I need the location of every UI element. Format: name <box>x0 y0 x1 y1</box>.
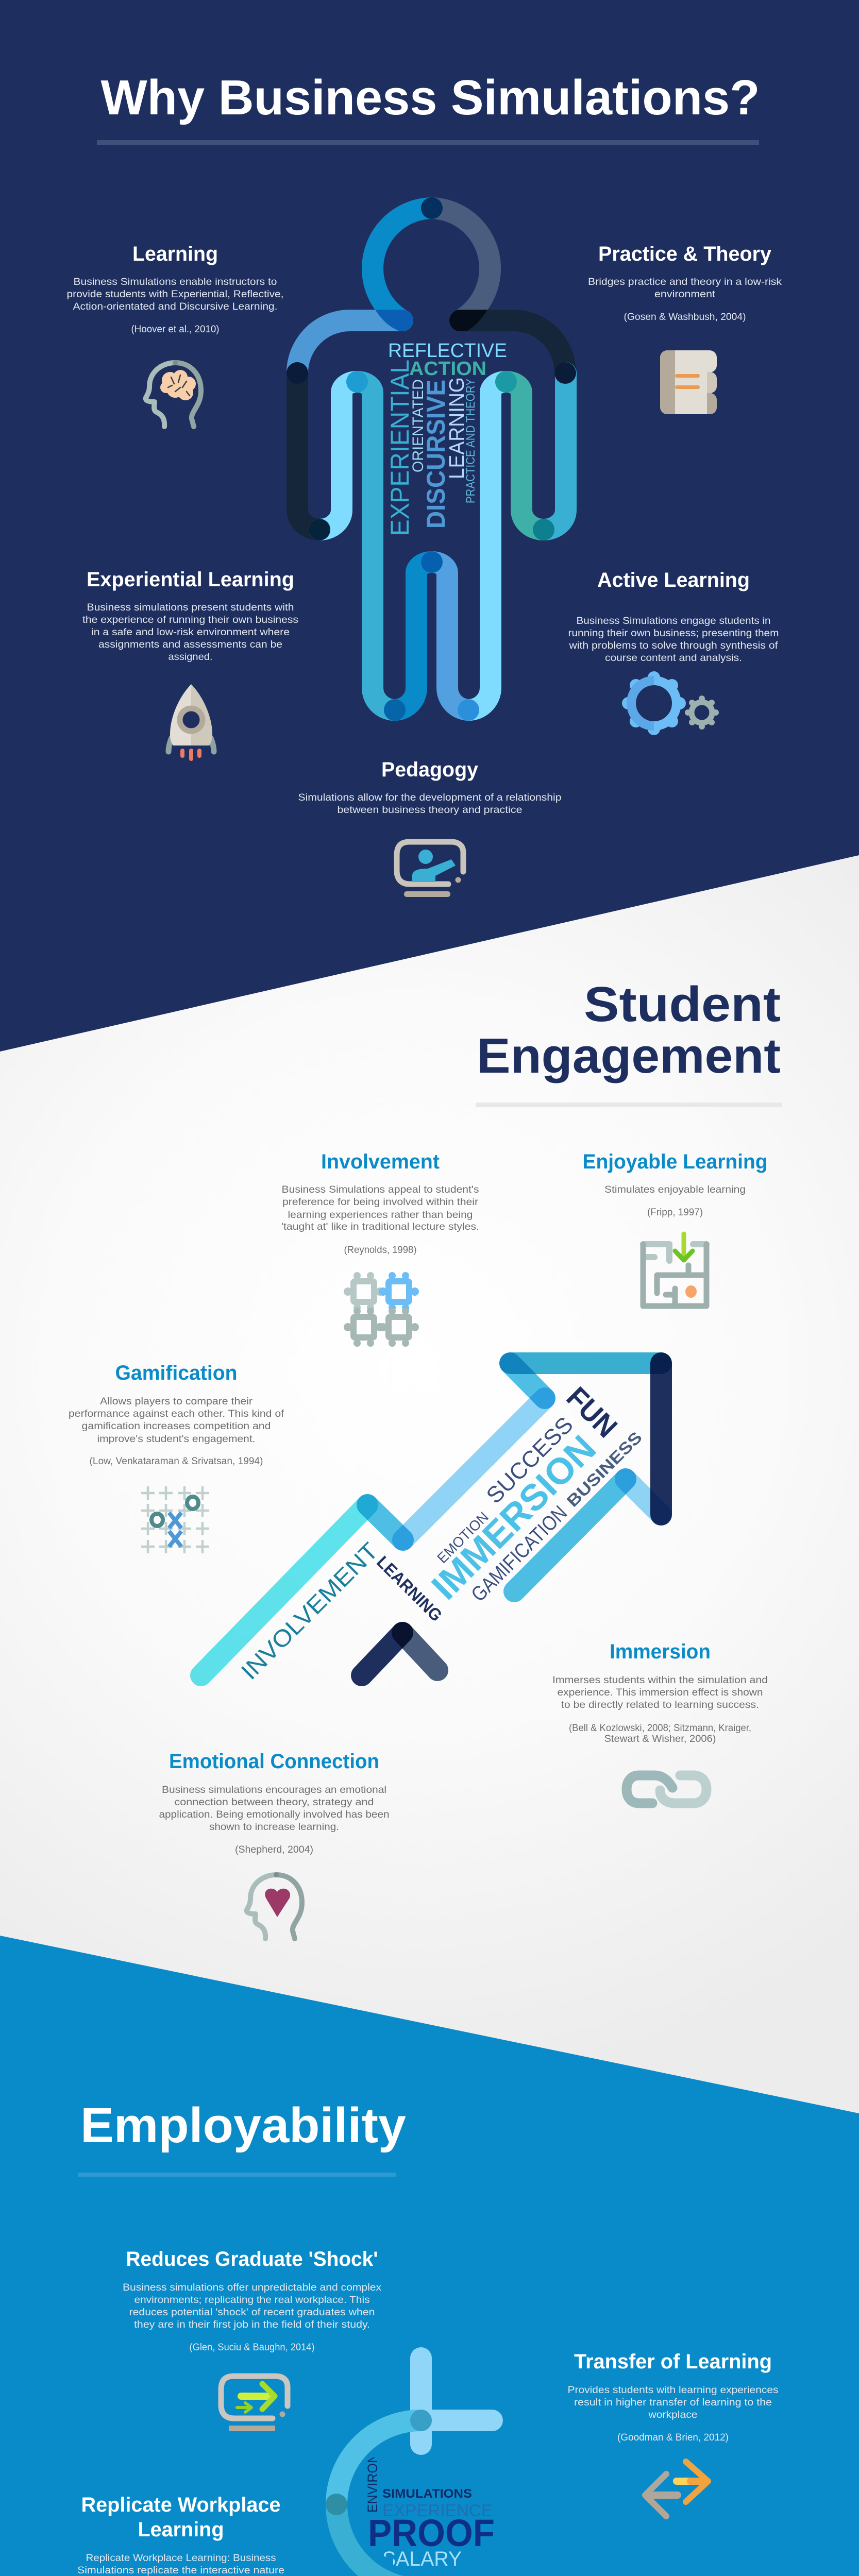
panel: enjoyable learning <box>582 1150 768 1306</box>
word cloud: employability: PROOF <box>368 2512 495 2554</box>
panel: replicate workplace learning <box>77 2494 284 2576</box>
text: experiential learning <box>82 602 298 663</box>
text: involvement: (Reynolds, 1998) <box>344 1245 416 1256</box>
panel: reduces graduate shock <box>123 2248 382 2431</box>
icon: book <box>660 350 717 414</box>
text: active learning: course content and analysis. <box>605 653 742 664</box>
panel: gamification <box>69 1362 284 1553</box>
icon: rocket <box>169 684 214 759</box>
text: gamification <box>69 1396 284 1467</box>
text: reduces graduate shock: reduces potential 'shock' of recent graduates when <box>129 2307 375 2318</box>
heading underline <box>476 1103 782 1107</box>
text: active learning <box>568 616 779 664</box>
word cloud: human: EXPERIENTIAL <box>385 360 414 536</box>
word cloud: human: REFLECTIVE <box>388 340 507 362</box>
text: learning: Action-orientated and Discursive Learning. <box>73 301 277 312</box>
panel: active learning <box>568 569 779 735</box>
text: immersion: Stewart & Wisher, 2006) <box>604 1734 716 1744</box>
heading: student engagement <box>477 977 781 1083</box>
text: reduces graduate shock <box>123 2282 382 2353</box>
text: replicate workplace learning: Simulations replicate the interactive nature <box>77 2565 284 2576</box>
heading: pedagogy: Pedagogy <box>381 758 479 781</box>
text: gamification: Allows players to compare their <box>100 1396 253 1407</box>
panel: practice and theory <box>588 243 782 414</box>
heading: practice and theory: Practice & Theory <box>598 243 772 265</box>
icon: chain link <box>627 1775 706 1803</box>
heading: enjoyable learning: Enjoyable Learning <box>582 1150 768 1173</box>
text: involvement <box>281 1184 479 1256</box>
panel: immersion <box>552 1640 768 1803</box>
text: pedagogy: Simulations allow for the development of a relationship <box>298 792 562 803</box>
word cloud: arrow: EMOTION <box>434 1509 492 1566</box>
word cloud: employability: SALARY <box>382 2548 462 2570</box>
text: practice and theory: Bridges practice and theory in a low-risk <box>588 277 782 287</box>
arrow with word cloud <box>201 1363 661 1685</box>
heading: employability: Employability <box>80 2098 406 2153</box>
text: learning: Business Simulations enable instructors to <box>73 277 277 287</box>
title underline <box>97 140 759 145</box>
human figure with word cloud <box>287 197 576 721</box>
text: emotional connection: (Shepherd, 2004) <box>235 1844 313 1855</box>
icon: maze <box>643 1234 706 1306</box>
text: practice and theory: environment <box>654 289 716 300</box>
text: gamification: gamification increases competition and <box>81 1421 271 1432</box>
text: reduces graduate shock: (Glen, Suciu & Baughn, 2014) <box>190 2342 314 2353</box>
heading: student engagement: Student <box>584 977 781 1032</box>
text: experiential learning: assigned. <box>168 652 212 663</box>
word cloud: employability <box>367 2458 494 2566</box>
text: learning: (Hoover et al., 2010) <box>131 324 220 335</box>
text: transfer of learning <box>568 2385 778 2443</box>
text: practice and theory: (Gosen & Washbush, 2004) <box>624 312 746 323</box>
panel: experiential learning <box>82 568 298 759</box>
panel: emotional connection <box>159 1750 390 1939</box>
word cloud: arrow <box>235 1381 646 1685</box>
text: experiential learning: the experience of running their own business <box>82 615 298 625</box>
S shape with word cloud <box>326 2347 503 2576</box>
text: transfer of learning: result in higher transfer of learning to the <box>574 2397 772 2408</box>
heading: emotional connection: Emotional Connection <box>169 1750 379 1773</box>
text: replicate workplace learning <box>77 2553 284 2576</box>
word cloud: arrow: IMMERSION <box>424 1428 604 1607</box>
section: employability <box>77 2098 778 2576</box>
word cloud: arrow: LEARNING <box>373 1552 446 1625</box>
section: why business simulations <box>67 70 782 897</box>
text: reduces graduate shock: Business simulations offer unpredictable and complex <box>123 2282 382 2293</box>
text: enjoyable learning <box>604 1184 746 1218</box>
text: active learning: with problems to solve through synthesis of <box>568 640 778 651</box>
panel: transfer of learning <box>568 2350 778 2516</box>
heading: transfer of learning: Transfer of Learning <box>574 2350 772 2373</box>
heading: reduces graduate shock: Reduces Graduate 'Shock' <box>126 2248 378 2270</box>
text: gamification: (Low, Venkataraman & Srivatsan, 1994) <box>90 1456 263 1467</box>
title: Why Business Simulations? <box>101 70 760 125</box>
text: practice and theory <box>588 277 782 323</box>
heading: student engagement: Engagement <box>477 1028 781 1083</box>
text: reduces graduate shock: environments; replicating the real workplace. This <box>134 2295 370 2306</box>
heading: gamification: Gamification <box>115 1362 237 1384</box>
word cloud: arrow: FUN <box>560 1381 624 1444</box>
icon: teacher at screen <box>397 842 463 897</box>
text: emotional connection: Business simulations encourages an emotional <box>162 1785 386 1795</box>
text: emotional connection: application. Being emotionally involved has been <box>159 1809 390 1820</box>
text: experiential learning: Business simulations present students with <box>87 602 294 613</box>
text: experiential learning: in a safe and low-risk environment where <box>91 627 290 638</box>
text: emotional connection: connection between theory, strategy and <box>174 1797 374 1808</box>
panel: involvement <box>281 1150 479 1347</box>
text: emotional connection: shown to increase learning. <box>209 1822 339 1833</box>
text: immersion: experience. This immersion effect is shown <box>558 1687 763 1698</box>
icon: gears <box>622 671 719 735</box>
heading: involvement: Involvement <box>321 1150 440 1173</box>
text: pedagogy: between business theory and practice <box>337 805 523 816</box>
text: immersion: to be directly related to learning success. <box>561 1700 759 1710</box>
text: immersion: Immerses students within the simulation and <box>552 1675 768 1686</box>
text: active learning: Business Simulations engage students in <box>576 616 771 626</box>
text: experiential learning: assignments and assessments can be <box>98 639 282 650</box>
heading: immersion: Immersion <box>610 1640 711 1663</box>
icon: head with brain <box>146 360 201 427</box>
text: enjoyable learning: (Fripp, 1997) <box>647 1207 703 1218</box>
text: involvement: 'taught at' like in traditional lecture styles. <box>281 1222 479 1232</box>
text: active learning: running their own business; presenting them <box>568 628 779 639</box>
text: immersion <box>552 1675 768 1744</box>
word cloud: human <box>385 340 507 536</box>
icon: head with heart <box>247 1872 302 1939</box>
heading: experiential learning: Experiential Learning <box>87 568 294 591</box>
icon: exchange arrows <box>645 2462 708 2516</box>
word cloud: employability: ENVIRONMENT <box>365 2417 380 2513</box>
word cloud: arrow: SUCCESS <box>481 1412 578 1509</box>
heading underline <box>78 2173 396 2177</box>
heading: replicate workplace learning: Replicate Workplace <box>81 2494 280 2516</box>
heading: learning: Learning <box>132 243 218 265</box>
text: learning: provide students with Experiential, Reflective, <box>67 289 283 300</box>
word cloud: human: PRACTICE AND THEORY <box>464 379 478 503</box>
text: gamification: performance against each other. This kind of <box>69 1409 284 1419</box>
text: transfer of learning: (Goodman & Brien, 2012) <box>617 2432 729 2443</box>
text: involvement: preference for being involved within their <box>282 1197 479 1208</box>
text: immersion: (Bell & Kozlowski, 2008; Sitzmann, Kraiger, <box>569 1723 751 1734</box>
text: reduces graduate shock: they are in their first job in the field of their study. <box>134 2319 370 2330</box>
word cloud: employability: EXPERIENCE <box>382 2501 493 2520</box>
icon: tic tac toe <box>141 1486 209 1553</box>
word cloud: human: ACTION <box>409 358 486 380</box>
word cloud: human: ORIENTATED <box>410 379 427 472</box>
panel: pedagogy <box>298 758 562 897</box>
panel: learning <box>67 243 283 427</box>
text: transfer of learning: Provides students with learning experiences <box>568 2385 778 2396</box>
word cloud: arrow: BUSINESS <box>563 1428 646 1511</box>
section: student engagement <box>69 977 782 1939</box>
text: transfer of learning: workplace <box>648 2410 698 2420</box>
text: gamification: improve's student's engagement. <box>97 1434 256 1445</box>
word cloud: arrow: GAMIFICATION <box>467 1501 571 1606</box>
heading: active learning: Active Learning <box>597 569 750 591</box>
text: involvement: learning experiences rather than being <box>288 1210 473 1221</box>
text: emotional connection <box>159 1785 390 1855</box>
word cloud: human: DISCURSIVE <box>422 380 450 529</box>
text: enjoyable learning: Stimulates enjoyable learning <box>604 1184 746 1195</box>
heading: replicate workplace learning: Learning <box>138 2518 224 2541</box>
word cloud: arrow: INVOLVEMENT <box>235 1537 383 1685</box>
word cloud: employability: SIMULATIONS <box>382 2487 472 2501</box>
text: pedagogy <box>298 792 562 816</box>
icon: puzzle pieces <box>344 1272 419 1347</box>
text: learning <box>67 277 283 335</box>
word cloud: human: LEARNING <box>445 377 468 479</box>
icon: screen with arrows <box>221 2376 288 2431</box>
text: involvement: Business Simulations appeal to student's <box>281 1184 479 1195</box>
heading: replicate workplace learning <box>81 2494 280 2541</box>
text: replicate workplace learning: Replicate Workplace Learning: Business <box>86 2553 276 2564</box>
